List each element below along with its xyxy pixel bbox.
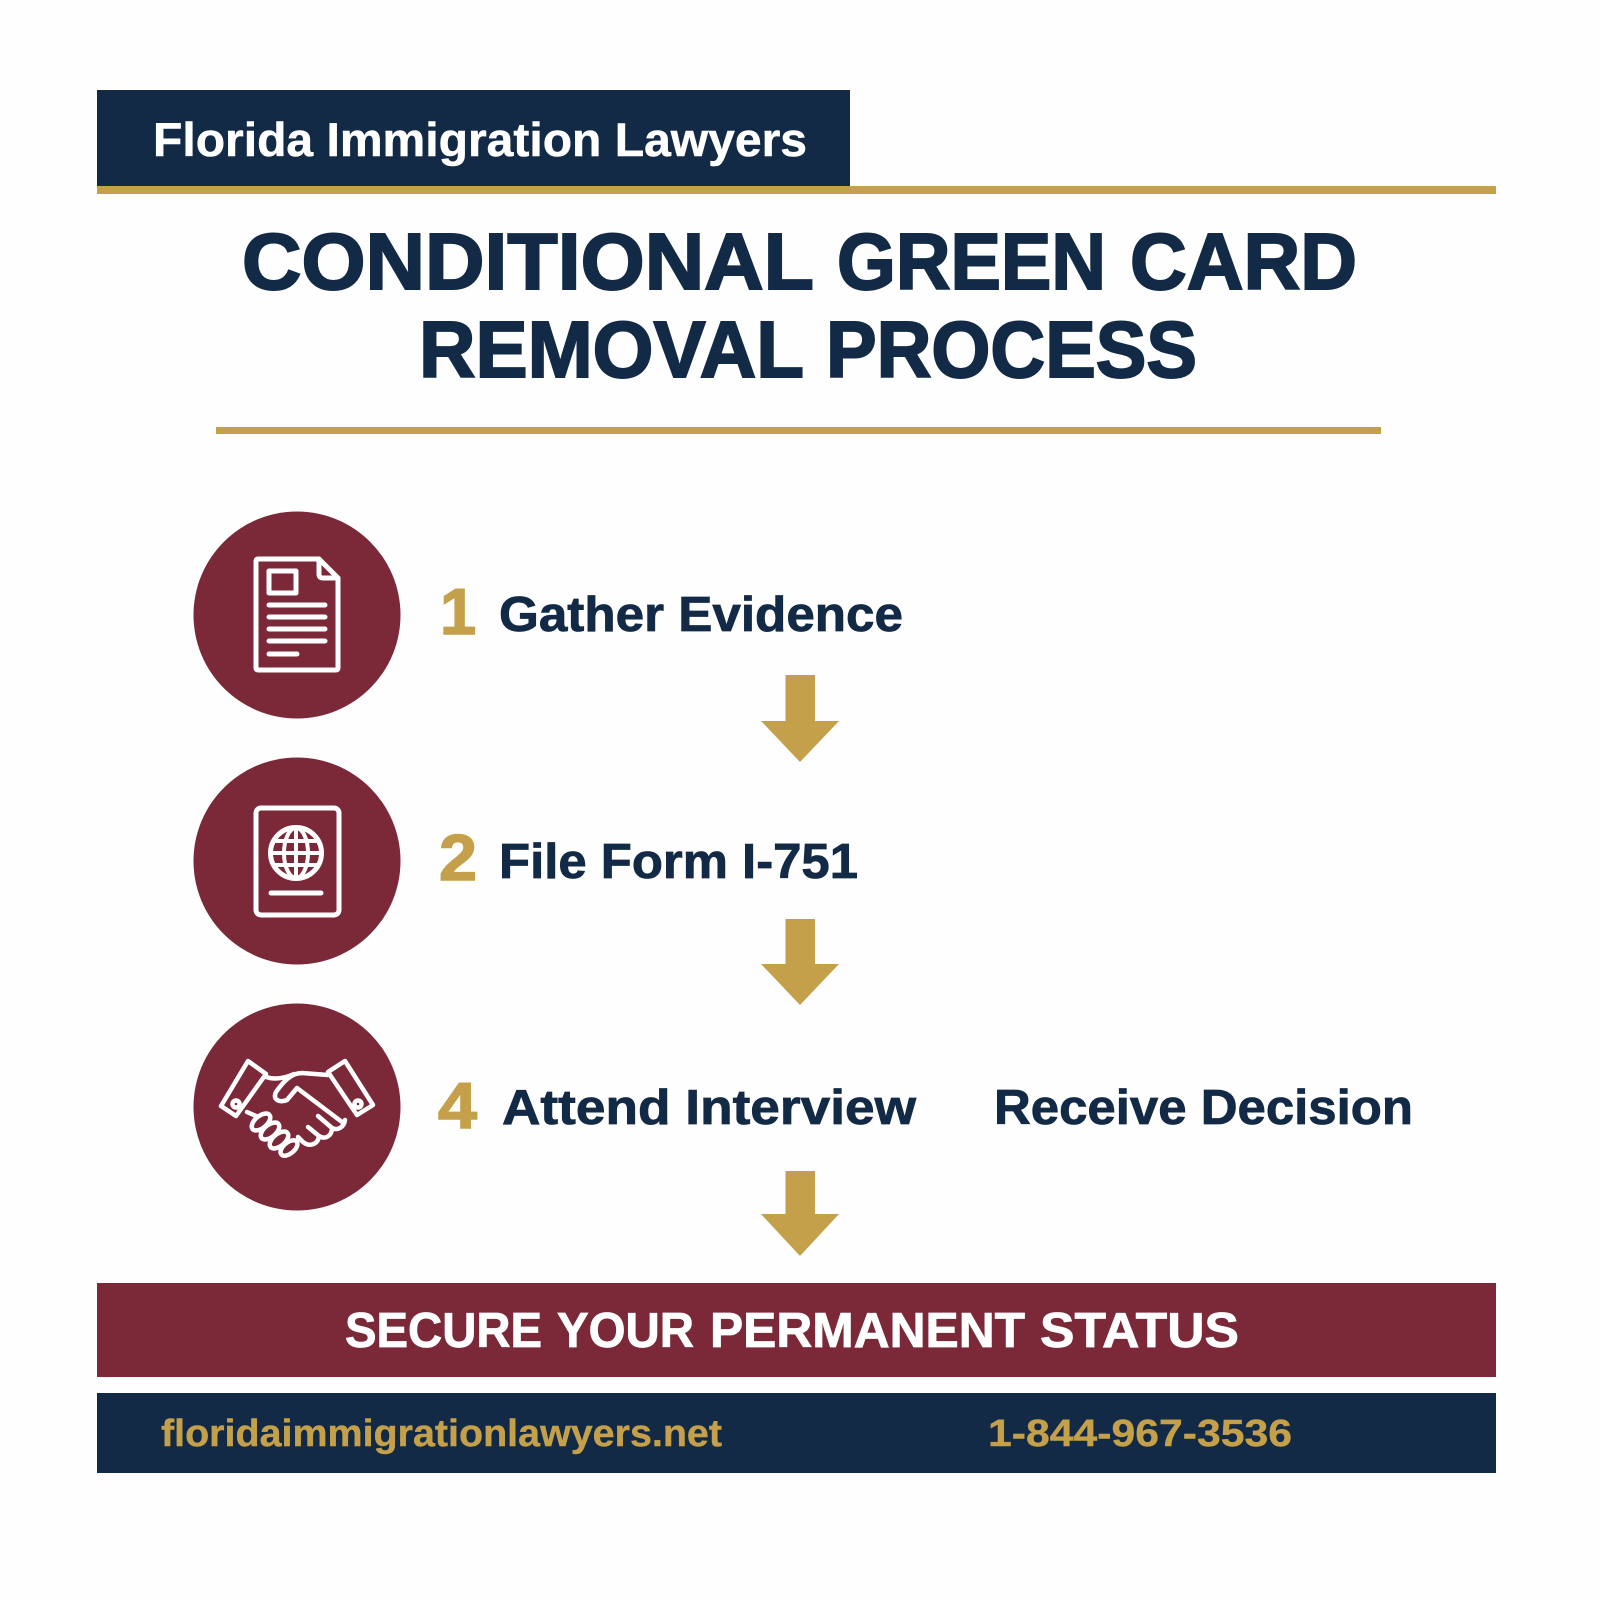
header brand banner: Florida Immigration Lawyers xyxy=(153,113,807,166)
label: attend interview: Attend Interview xyxy=(502,1081,917,1135)
title: CARD xyxy=(1130,217,1357,306)
phone: 1-844-967-3536 xyxy=(988,1413,1292,1455)
label: file form: File Form I-751 xyxy=(499,835,858,889)
number 2: 2 xyxy=(439,821,477,894)
header brand banner xyxy=(97,90,1496,194)
website: floridaimmigrationlawyers.net xyxy=(161,1413,722,1455)
title xyxy=(242,217,1357,394)
step 1: gather evidence xyxy=(194,512,903,718)
label: gather evidence: Gather Evidence xyxy=(499,588,903,642)
step 3: attend interview xyxy=(194,1004,917,1210)
icon: handshake xyxy=(221,1061,373,1159)
arrow 3 xyxy=(761,1171,839,1256)
number 1: 1 xyxy=(440,575,476,648)
arrow 2 xyxy=(761,919,839,1005)
title: CONDITIONAL xyxy=(242,217,814,306)
title: GREEN xyxy=(837,217,1106,306)
icon: passport xyxy=(256,808,339,915)
step 2: file form xyxy=(194,758,858,964)
call to action banner: SECURE xyxy=(345,1304,542,1358)
icon: document xyxy=(256,559,338,670)
title: REMOVAL xyxy=(419,305,804,394)
label: receive decision: Receive Decision xyxy=(994,1081,1413,1135)
title underline xyxy=(216,427,1381,434)
call to action banner: STATUS xyxy=(1040,1304,1239,1358)
number 4: 4 xyxy=(438,1069,477,1142)
call to action banner: YOUR xyxy=(557,1304,694,1358)
title: PROCESS xyxy=(826,305,1197,394)
call to action banner xyxy=(97,1283,1496,1377)
arrow 1 xyxy=(761,675,839,762)
call to action banner: PERMANENT xyxy=(710,1304,1025,1358)
footer contact bar xyxy=(97,1393,1496,1473)
